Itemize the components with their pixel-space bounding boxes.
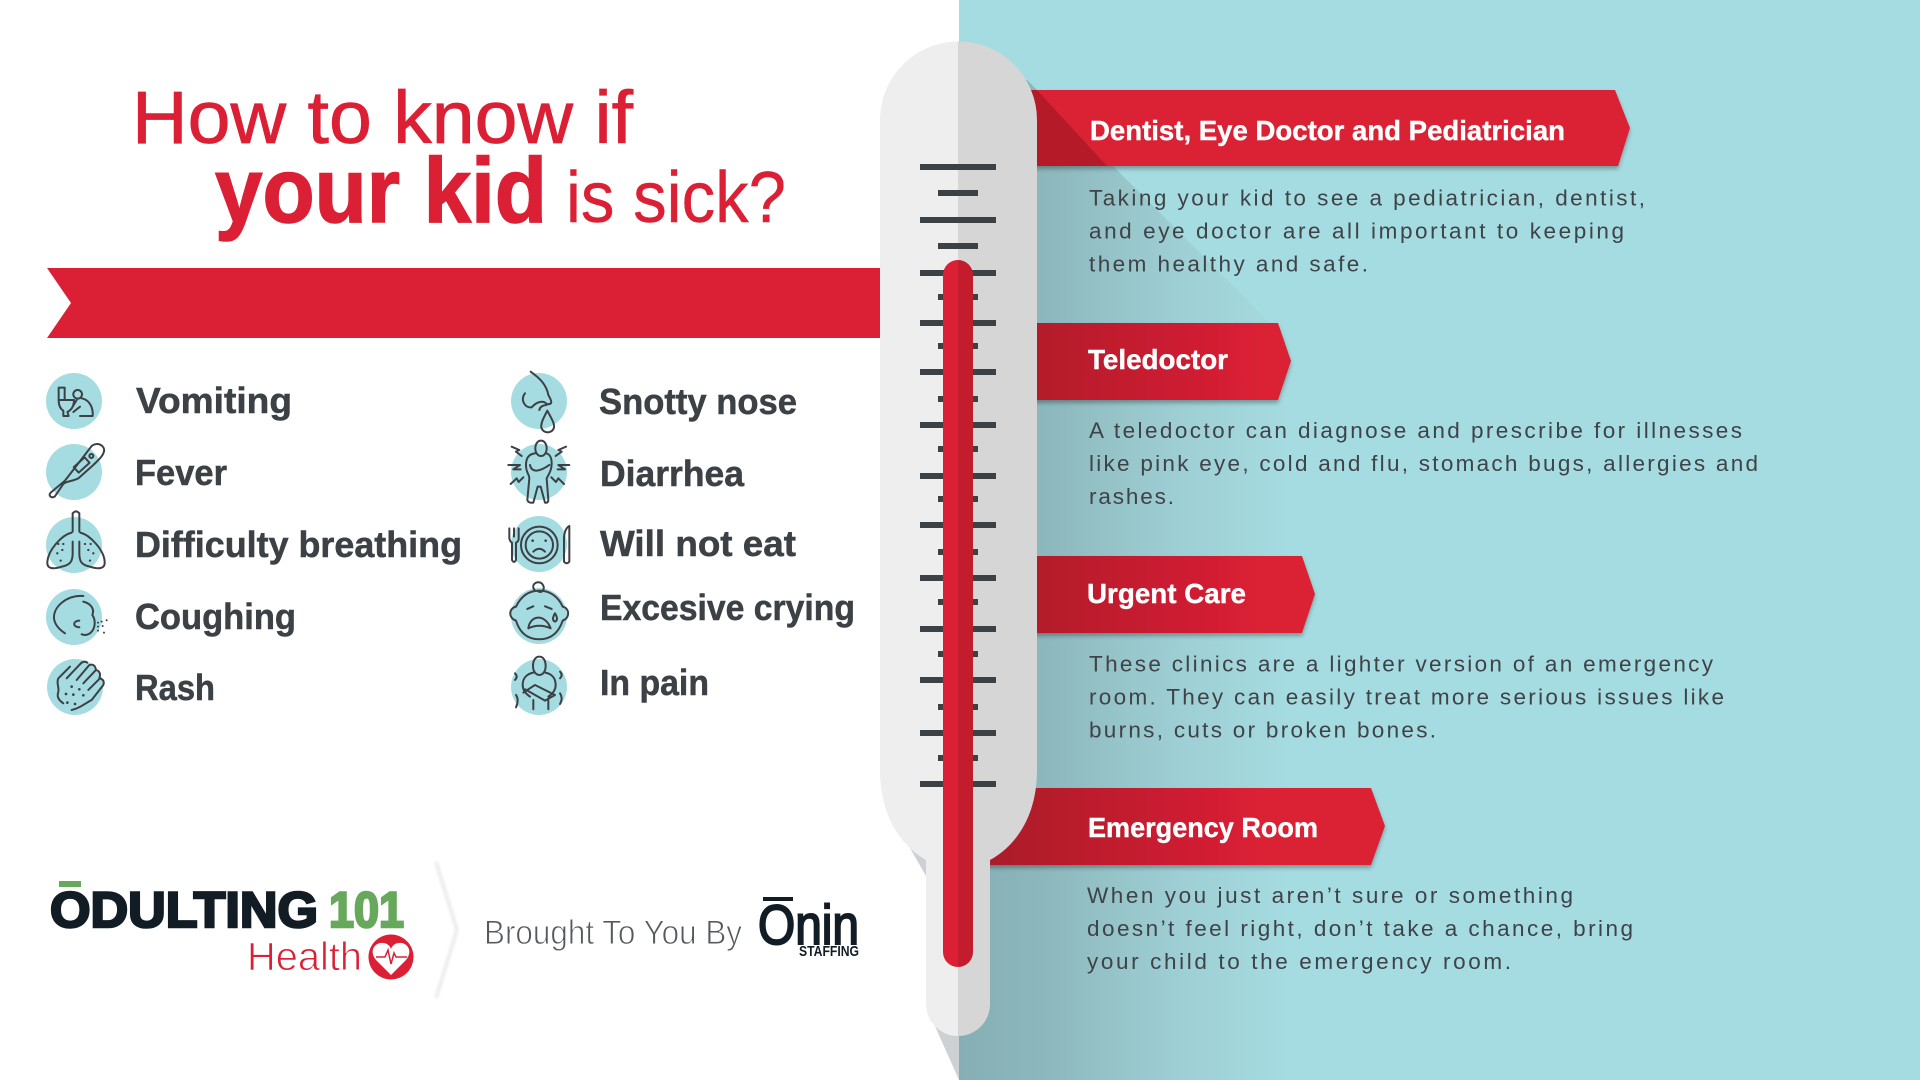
snotty nose item — [511, 372, 797, 432]
diarrhea item: Diarrhea — [600, 453, 745, 494]
logo: Onin Staffing: Onin — [758, 893, 859, 956]
icon: heart in circle — [368, 934, 414, 980]
title — [132, 76, 786, 242]
logo: Onin Staffing: STAFFING — [799, 943, 859, 960]
excesive crying item: Excesive crying — [600, 587, 855, 628]
vomiting item: Vomiting — [136, 380, 292, 421]
text: dentist description: Taking your kid to see a pediatrician, dentist, — [1089, 186, 1645, 210]
ribbon: urgent care — [1020, 556, 1315, 633]
logo: Odulting 101 Health: Health — [247, 935, 362, 979]
difficulty breathing item — [46, 511, 462, 573]
thermometer mercury tube — [943, 260, 973, 967]
fever item — [46, 444, 227, 500]
difficulty breathing item: Difficulty breathing — [135, 524, 462, 565]
fever item: Fever — [135, 452, 227, 493]
in pain item — [511, 657, 709, 715]
logo: Odulting 101 Health — [50, 881, 414, 980]
symptom list: right column — [508, 372, 855, 715]
ribbon: dentist: Dentist, Eye Doctor and Pediatrician — [1090, 115, 1565, 146]
logo: Odulting 101 Health: ODULTING — [50, 882, 318, 938]
text: dentist description: them healthy and safe. — [1089, 252, 1368, 276]
coughing item: Coughing — [135, 596, 296, 637]
thermometer tick marks — [920, 164, 996, 787]
coughing item — [46, 589, 296, 645]
text: teledoctor description: like pink eye, cold and flu, stomach bugs, allergies and — [1089, 451, 1758, 476]
ribbon: urgent care: Urgent Care — [1087, 578, 1246, 609]
chevron divider — [436, 862, 457, 998]
ribbon: emergency room: Emergency Room — [1088, 812, 1318, 843]
rash item: Rash — [135, 667, 215, 708]
text: emergency room description: doesn’t feel right, don’t take a chance, bring — [1087, 916, 1633, 941]
ribbon: teledoctor — [1020, 323, 1291, 400]
text: teledoctor description: rashes. — [1089, 484, 1174, 509]
diarrhea item — [508, 441, 745, 503]
long shadow of the thermometer — [959, 80, 1290, 1080]
title: is sick? — [566, 158, 786, 238]
text: urgent care description — [1089, 652, 1724, 742]
rash item — [47, 659, 215, 715]
shadow under thermometer bulb — [930, 1015, 959, 1080]
title: How to know if — [132, 76, 633, 159]
vomiting item — [46, 373, 292, 429]
in pain item: In pain — [600, 662, 709, 703]
title: your kid — [215, 140, 547, 242]
text: teledoctor description: A teledoctor can diagnose and prescribe for illnesses — [1089, 418, 1742, 443]
snotty nose item: Snotty nose — [599, 381, 797, 422]
shadow under thermometer shoulder — [910, 848, 926, 876]
text: emergency room description — [1087, 883, 1633, 974]
text: emergency room description: When you just aren’t sure or something — [1087, 883, 1573, 908]
text: urgent care description: These clinics are a lighter version of an emergency — [1089, 652, 1714, 676]
thermometer body — [880, 42, 1037, 1036]
red banner — [47, 268, 880, 338]
text: urgent care description: burns, cuts or broken bones. — [1089, 718, 1436, 742]
text: urgent care description: room. They can easily treat more serious issues like — [1089, 684, 1724, 710]
teal background panel — [959, 0, 1920, 1080]
ribbon: teledoctor: Teledoctor — [1088, 344, 1228, 375]
text: dentist description — [1089, 186, 1645, 276]
text: emergency room description: your child to the emergency room. — [1087, 949, 1511, 974]
text: teledoctor description — [1089, 418, 1758, 509]
thermometer — [880, 42, 1037, 1036]
will not eat item — [509, 516, 796, 572]
logo: Odulting 101 Health: 101 — [329, 882, 404, 938]
will not eat item: Will not eat — [600, 523, 796, 564]
ribbon: emergency room — [985, 788, 1385, 865]
excesive crying item — [510, 582, 855, 644]
text: dentist description: and eye doctor are all important to keeping — [1089, 218, 1624, 244]
ribbon: dentist — [1020, 90, 1630, 166]
brought to you by text: Brought To You By — [484, 914, 742, 952]
symptom list: left column — [46, 373, 462, 715]
